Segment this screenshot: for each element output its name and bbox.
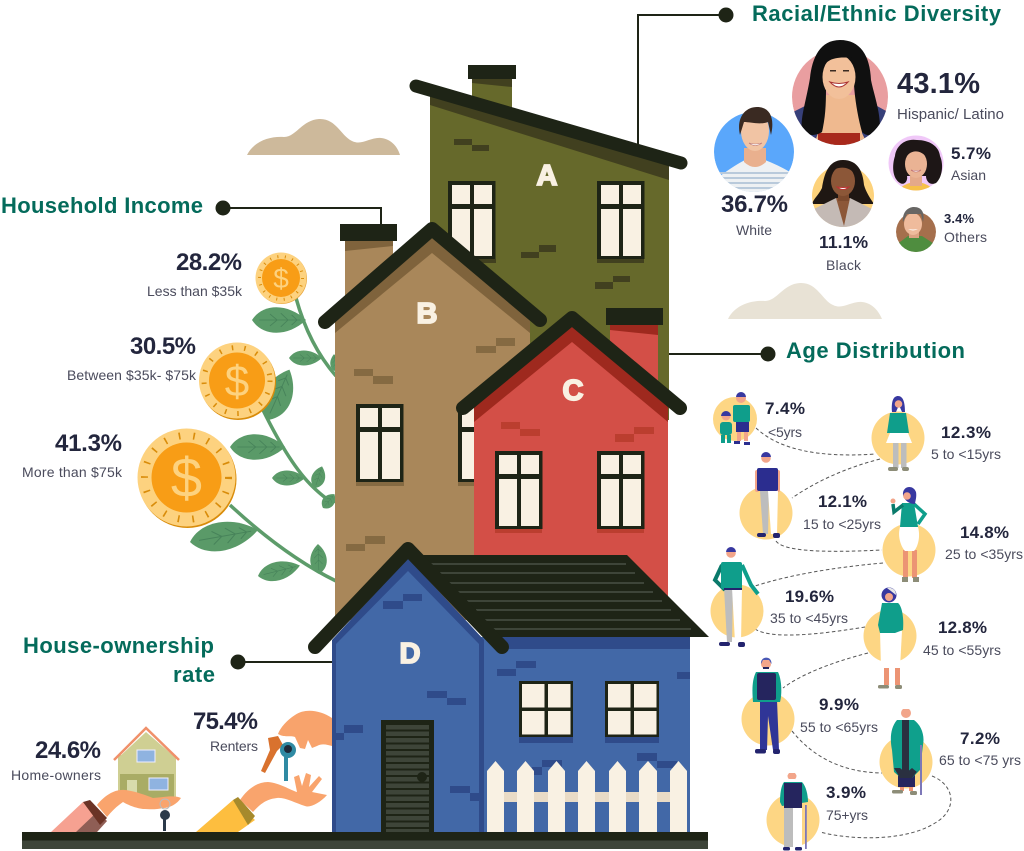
- stat: 15 to 25: 12.1%: [818, 492, 867, 511]
- stat: 45 to 55: 12.8%: [938, 618, 987, 637]
- stat: 65 to 75: [939, 729, 1021, 768]
- stat: 55 to 65: [800, 695, 878, 735]
- icon: hand receiving keys: [196, 773, 327, 832]
- stat: White: 36.7%: [721, 191, 788, 218]
- stat: income over 75k: [22, 430, 123, 480]
- stat: renters: Renters: [210, 738, 258, 754]
- portrait: Others: [896, 207, 936, 255]
- stat: 5 to 15: 5 to <15yrs: [931, 446, 1001, 462]
- cloud left: [247, 119, 400, 155]
- heading: house ownership: House-ownership: [23, 633, 214, 658]
- stat: income over 75k: 41.3%: [55, 430, 122, 457]
- stat: Others: [944, 211, 987, 245]
- door: [381, 720, 434, 832]
- stat: 45 to 55: [923, 618, 1001, 658]
- house B: [325, 224, 540, 620]
- stat: 55 to 65: 55 to <65yrs: [800, 719, 878, 735]
- money plant stems and leaves: [188, 298, 342, 585]
- person: 35 to 45: [710, 547, 764, 647]
- stat: income 35k to 75k: 30.5%: [130, 333, 196, 360]
- person: 55 to 65: [742, 658, 794, 754]
- coin: more than 75k: $: [171, 446, 202, 509]
- connector lines: [223, 15, 768, 662]
- heading: house ownership: rate: [173, 662, 215, 687]
- stat: under 5: <5yrs: [768, 424, 802, 440]
- heading: age distribution: Age Distribution: [786, 338, 965, 363]
- stat: home-owners: Home-owners: [11, 767, 101, 783]
- cloud right: [728, 283, 882, 319]
- dashed age path: [755, 428, 951, 838]
- stat: Others: Others: [944, 229, 987, 245]
- house A: [416, 65, 681, 420]
- portrait: Asian: [888, 136, 944, 195]
- stat: 35 to 45: [770, 587, 848, 626]
- stat: 55 to 65: 9.9%: [819, 695, 859, 714]
- stat: 65 to 75: 7.2%: [960, 729, 1000, 748]
- stat: Hispanic: Hispanic/ Latino: [897, 106, 1004, 123]
- stat: income under 35k: 28.2%: [176, 249, 242, 276]
- stat: 35 to 45: 19.6%: [785, 587, 834, 606]
- stat: under 5: 7.4%: [765, 399, 805, 418]
- person: 65 to 75: [880, 706, 932, 795]
- person: 25 to 35: [882, 487, 936, 582]
- stat: White: White: [736, 222, 772, 238]
- stat: 75 plus: 3.9%: [826, 783, 866, 802]
- stat: income over 75k: More than $75k: [22, 464, 123, 480]
- stat: 75 plus: 75+yrs: [826, 807, 868, 823]
- stat: 65 to 75: 65 to <75 yrs: [939, 752, 1021, 768]
- house C: [463, 308, 680, 610]
- stat: 25 to 35: [945, 523, 1023, 562]
- letter C: C: [563, 375, 584, 407]
- stat: income under 35k: [147, 249, 243, 299]
- icon: hand giving keys: [261, 711, 332, 781]
- stat: 5 to 15: [931, 423, 1001, 462]
- stat: 15 to 25: [803, 492, 881, 532]
- heading: house ownership: [23, 633, 246, 687]
- person: under 5: [713, 392, 757, 445]
- person: 45 to 55: [864, 588, 916, 689]
- heading: racial diversity: Racial/Ethnic Diversity: [752, 1, 1002, 26]
- ground: [22, 832, 708, 849]
- stat: 5 to 15: 12.3%: [941, 423, 991, 442]
- stat: Black: 11.1%: [819, 232, 868, 252]
- portrait: Black: [812, 160, 874, 230]
- stat: income 35k to 75k: [67, 333, 197, 383]
- letter A: A: [537, 160, 558, 192]
- stat: 25 to 35: 25 to <35yrs: [945, 546, 1023, 562]
- stat: income under 35k: Less than $35k: [147, 283, 243, 299]
- coin: more than 75k: [138, 428, 236, 528]
- heading: household income: Household Income: [1, 193, 203, 218]
- stat: 15 to 25: 15 to <25yrs: [803, 516, 881, 532]
- stat: under 5: [765, 399, 805, 440]
- stat: renters: 75.4%: [193, 708, 258, 735]
- portrait: White: [714, 107, 794, 195]
- stat: home-owners: 24.6%: [35, 737, 101, 764]
- stat: income 35k to 75k: Between $35k- $75k: [67, 367, 197, 383]
- icon: hand with key left: [51, 790, 181, 832]
- stat: Asian: [951, 144, 991, 183]
- coin: less than 35k: $: [273, 263, 289, 294]
- stat: Asian: 5.7%: [951, 144, 991, 163]
- person: 5 to 15: [872, 396, 924, 471]
- letter B: B: [417, 298, 437, 330]
- coin: 35k to 75k: $: [225, 357, 249, 406]
- person: 15 to 25: [740, 452, 792, 540]
- stat: 35 to 45: 35 to <45yrs: [770, 610, 848, 626]
- dark roof: [422, 555, 709, 637]
- stat: 75 plus: [826, 783, 868, 823]
- coin: less than 35k: [256, 252, 307, 304]
- portrait: Hispanic: [792, 40, 888, 150]
- stat: White: [721, 191, 788, 238]
- stat: Others: 3.4%: [944, 211, 974, 226]
- stat: Black: [819, 232, 868, 273]
- stat: Black: Black: [826, 257, 862, 273]
- stat: home-owners: [11, 737, 101, 783]
- stat: renters: [193, 708, 258, 754]
- house D: [315, 549, 709, 832]
- person: 75 plus: [766, 770, 820, 850]
- stat: Hispanic: 43.1%: [897, 68, 980, 100]
- stat: Hispanic: [897, 68, 1004, 123]
- icon: small house on hand: [114, 728, 179, 799]
- stat: 45 to 55: 45 to <55yrs: [923, 642, 1001, 658]
- letter D: D: [400, 638, 420, 670]
- stat: Asian: Asian: [951, 167, 986, 183]
- picket fence: [487, 761, 687, 832]
- stat: 25 to 35: 14.8%: [960, 523, 1009, 542]
- coin: 35k to 75k: [199, 342, 276, 420]
